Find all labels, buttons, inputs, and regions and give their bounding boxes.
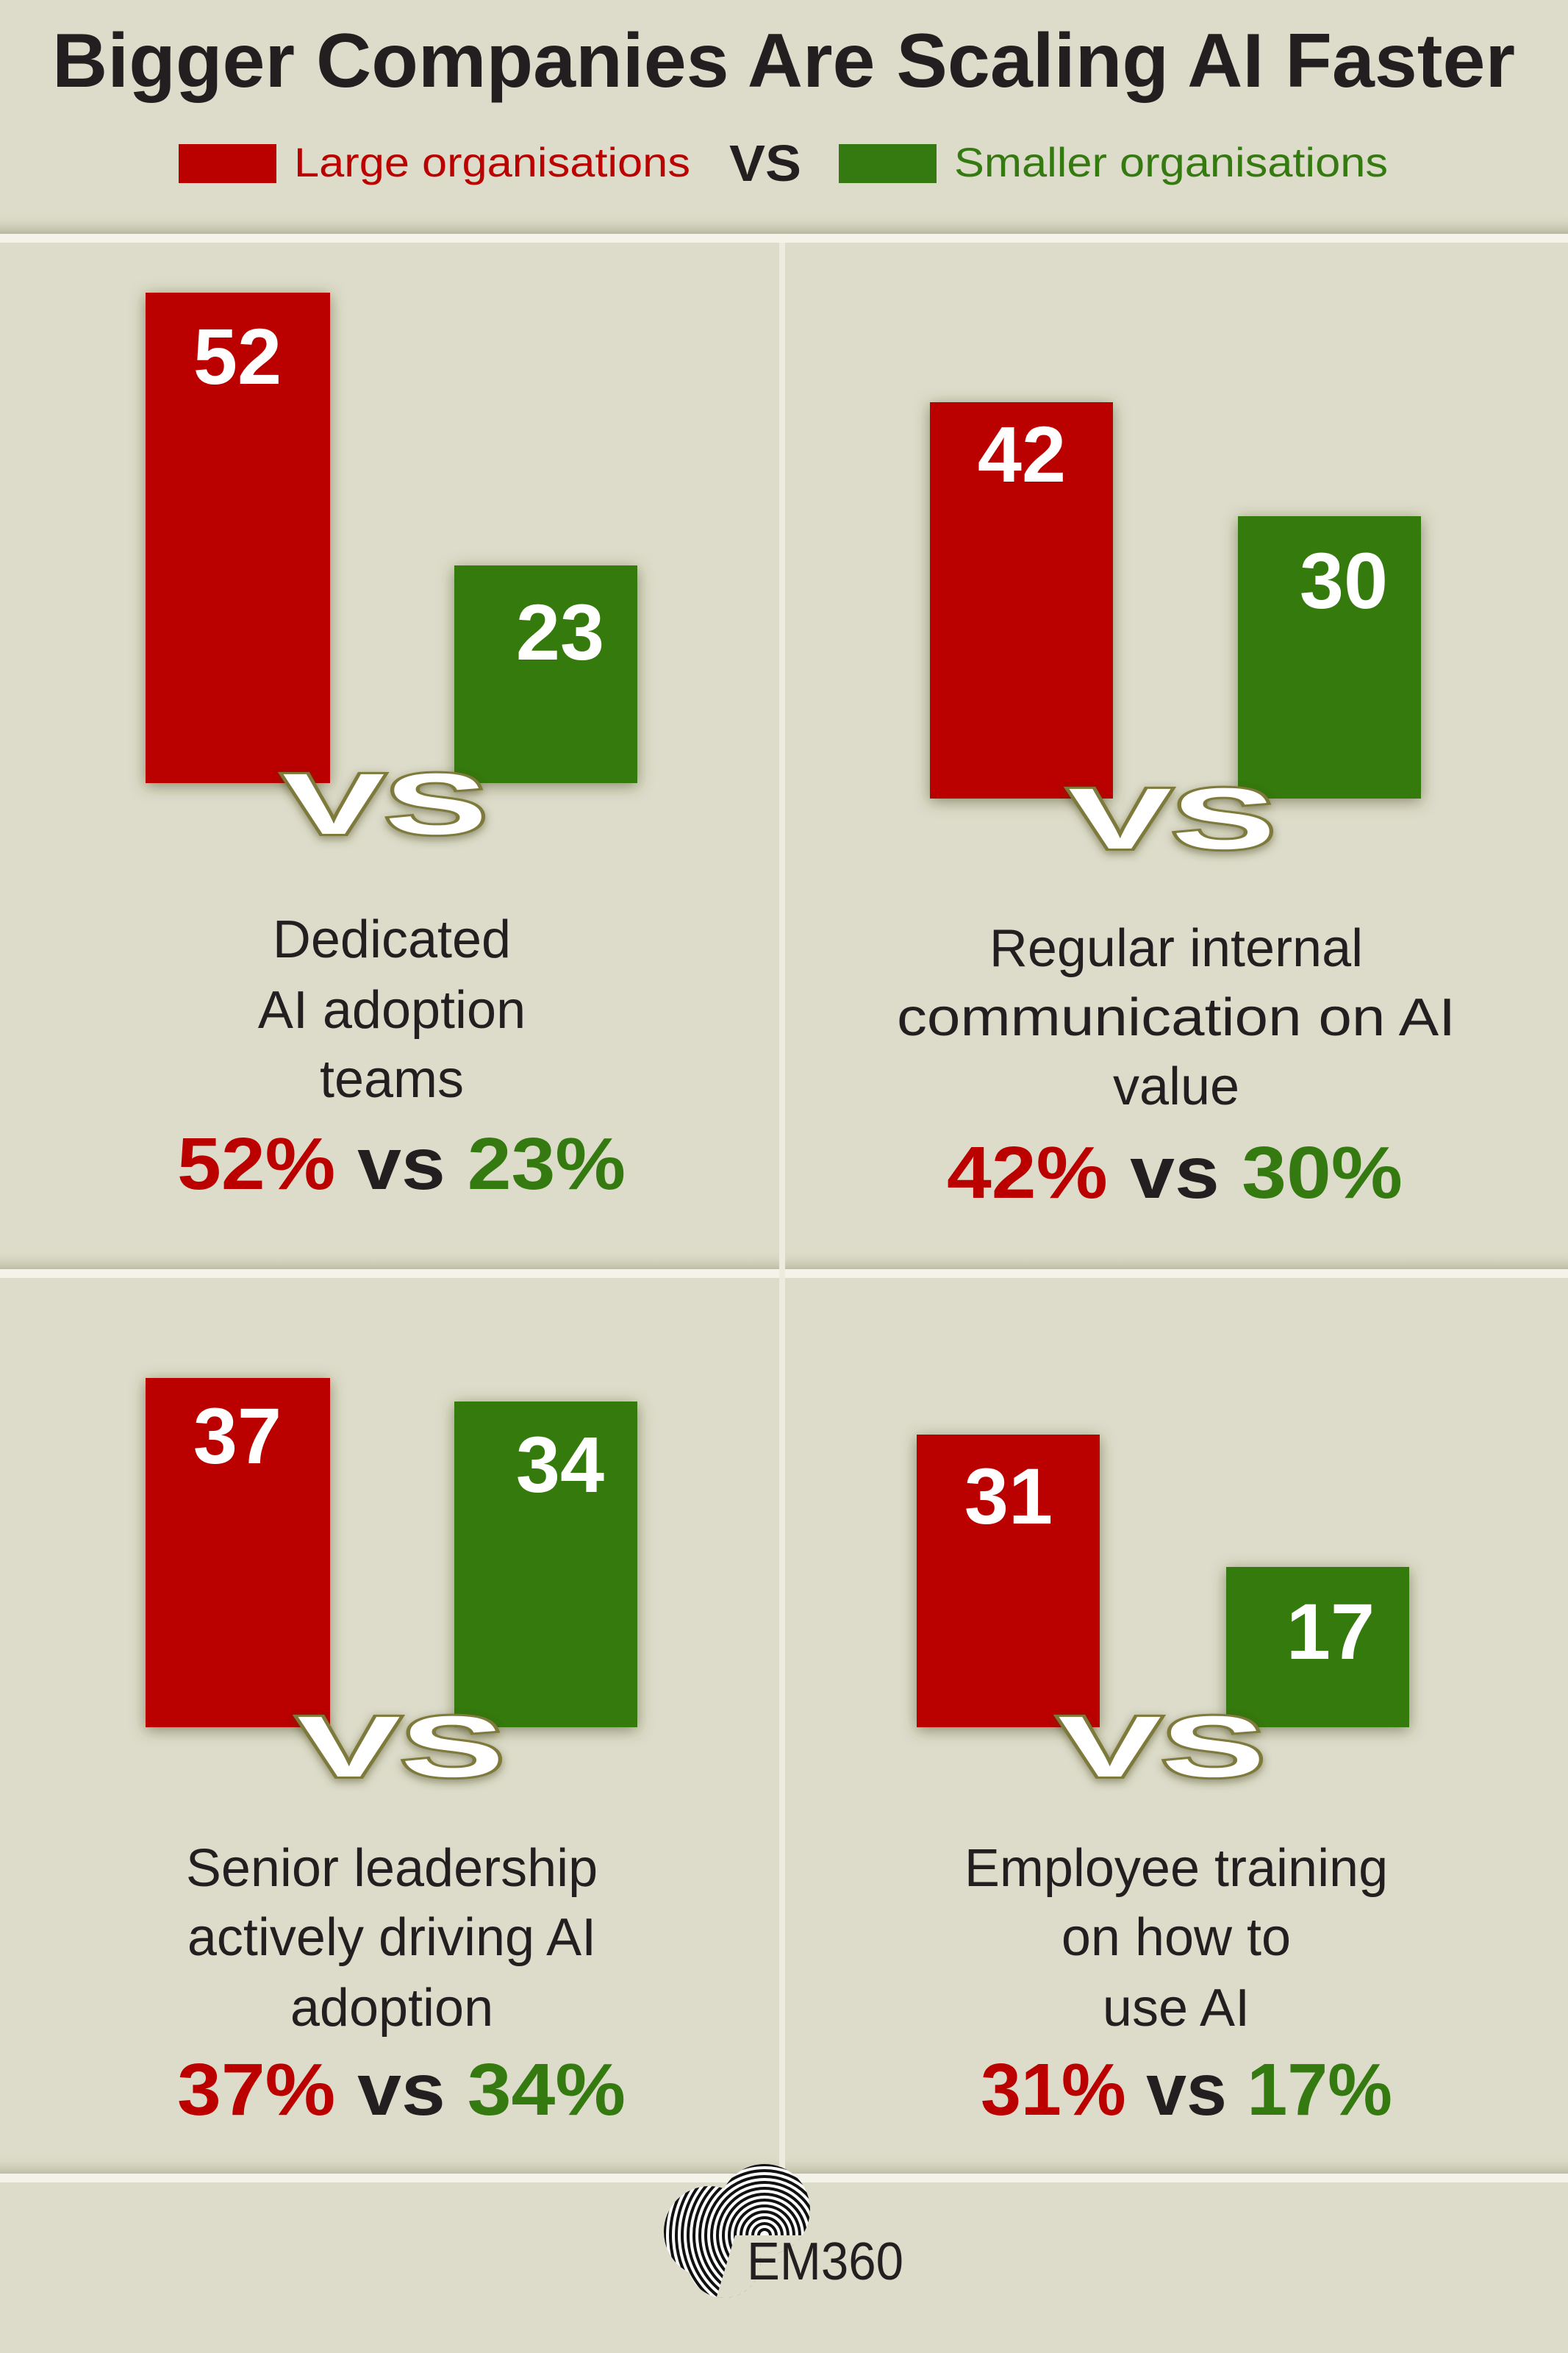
bar: small 17	[1226, 1567, 1409, 1727]
bar: small 30	[1238, 516, 1421, 799]
bar: small 34: 34	[516, 1420, 604, 1509]
label: on how to	[1062, 1908, 1291, 1967]
panel: employee training	[917, 1435, 1409, 2131]
title: Bigger Companies Are Scaling AI Faster	[52, 18, 1515, 104]
label: use AI	[1103, 1979, 1250, 2038]
label: Employee training	[964, 1839, 1388, 1898]
bar: large 37: 37	[193, 1391, 282, 1480]
bar: small 30: 30	[1300, 536, 1388, 625]
label: teams	[320, 1050, 464, 1109]
label	[186, 1839, 598, 2038]
bar: large 42	[930, 402, 1113, 799]
label: actively driving AI	[187, 1908, 596, 1967]
percent comparison: 37% vs 34%	[177, 2049, 626, 2131]
percent comparison: 52% vs 23%	[177, 1123, 626, 1205]
bar: large 52	[146, 293, 330, 783]
vs badge: VS	[282, 756, 487, 853]
divider shading	[0, 213, 1568, 234]
label: AI adoption	[258, 981, 526, 1040]
bar: small 23	[454, 565, 637, 783]
label: value	[1113, 1057, 1239, 1116]
label	[964, 1839, 1388, 2038]
panel: regular internal communication	[897, 402, 1456, 1214]
vs badge: VS	[297, 1699, 504, 1796]
bar: large 31: 31	[964, 1452, 1053, 1540]
bar: large 31	[917, 1435, 1100, 1727]
bar: small 23: 23	[516, 588, 604, 676]
legend	[179, 135, 1388, 192]
bar: large 52: 52	[193, 312, 282, 401]
label: Regular internal	[989, 919, 1363, 978]
logo: EM360	[664, 2164, 901, 2298]
panel: senior leadership	[146, 1378, 637, 2131]
vs badge: VS	[1058, 1699, 1265, 1796]
percent comparison: 42% vs 30%	[947, 1132, 1403, 1214]
logo text: EM360	[747, 2232, 903, 2291]
label: Dedicated	[273, 910, 511, 969]
bar: small 17: 17	[1286, 1587, 1375, 1676]
label	[258, 910, 526, 1109]
label: adoption	[290, 1979, 493, 2038]
bar: small 34	[454, 1402, 637, 1727]
label: Senior leadership	[186, 1839, 598, 1898]
vs badge: VS	[1068, 771, 1275, 868]
legend: VS	[729, 135, 801, 192]
label	[897, 919, 1456, 1116]
icon: concentric arcs	[664, 2164, 810, 2298]
panel: dedicated AI adoption teams	[146, 293, 637, 1205]
bar: large 42: 42	[978, 410, 1066, 499]
label: communication on AI	[897, 988, 1456, 1047]
legend: Smaller organisations	[954, 139, 1388, 185]
legend: Large organisations	[294, 139, 690, 185]
percent comparison: 31% vs 17%	[981, 2049, 1392, 2131]
bar: large 37	[146, 1378, 330, 1727]
